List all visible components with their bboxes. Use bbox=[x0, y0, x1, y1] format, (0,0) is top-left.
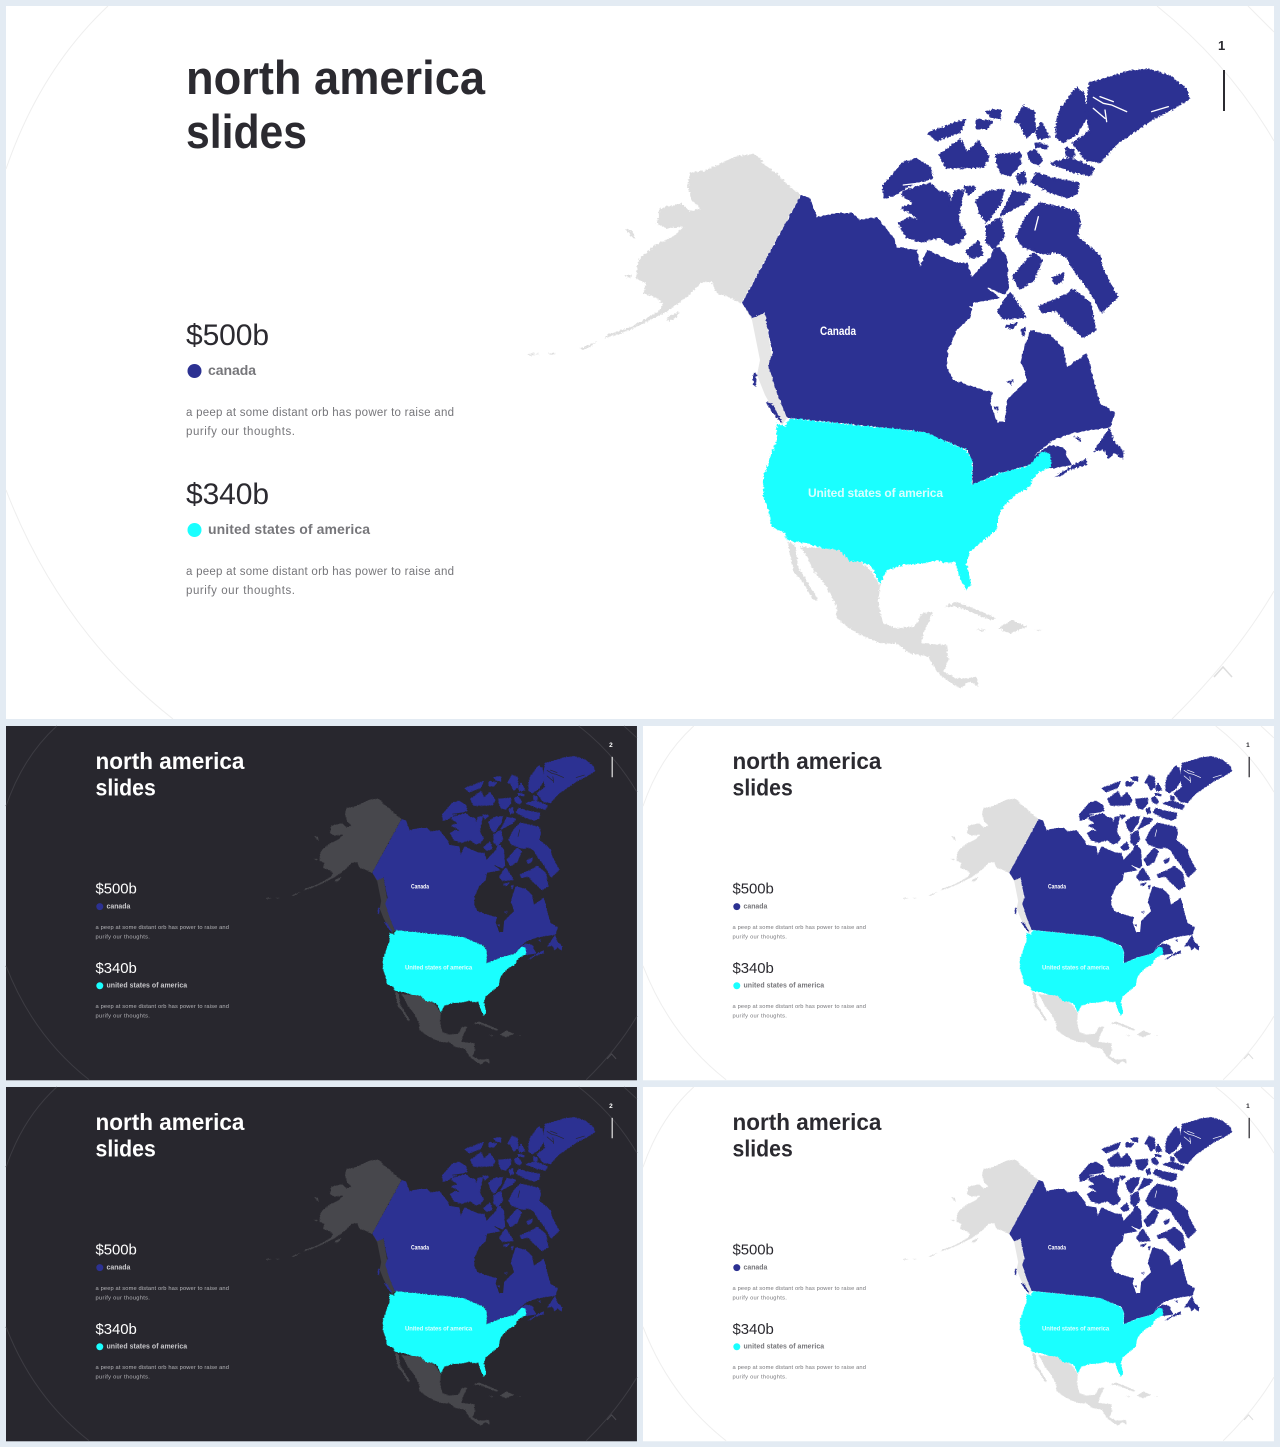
map label: united states: United states of america bbox=[1042, 965, 1110, 971]
page number and marker: 1 bbox=[1246, 742, 1250, 749]
heading bbox=[733, 748, 882, 801]
slide 2: small dark slide bbox=[6, 726, 637, 1080]
heading: slides bbox=[96, 775, 156, 801]
map of north america bbox=[266, 757, 594, 1065]
heading: north america bbox=[96, 748, 245, 774]
stat: canada: canada bbox=[208, 362, 256, 378]
map of north america bbox=[528, 70, 1188, 688]
page number and marker bbox=[609, 1103, 613, 1138]
stat: united states bbox=[733, 960, 866, 1020]
stat: canada: canada bbox=[744, 904, 768, 911]
heading: slides bbox=[186, 105, 307, 158]
stat: canada bbox=[733, 1242, 866, 1301]
heading bbox=[186, 51, 486, 158]
stat: united states bbox=[186, 478, 454, 597]
heading: north america bbox=[96, 1109, 245, 1135]
stat: canada bbox=[186, 319, 454, 438]
stat: canada: a peep at some distant orb has power to raise and bbox=[96, 1286, 229, 1292]
map of north america bbox=[903, 1118, 1231, 1426]
stat: canada bbox=[96, 881, 229, 940]
heading bbox=[96, 1109, 245, 1162]
page number and marker bbox=[609, 742, 613, 777]
slide 4: small dark slide bbox=[6, 1087, 637, 1441]
map label: canada: Canada bbox=[1048, 885, 1067, 891]
stat: united states: purify our thoughts. bbox=[733, 1375, 787, 1381]
map label: united states: United states of america bbox=[1042, 1326, 1110, 1332]
heading bbox=[733, 1109, 882, 1162]
stat: canada: purify our thoughts. bbox=[96, 934, 150, 940]
stat: united states: a peep at some distant orb has power to raise and bbox=[733, 1004, 866, 1010]
page number and marker: 2 bbox=[609, 1103, 613, 1110]
stat: canada: $500b bbox=[733, 881, 774, 898]
stat: united states: purify our thoughts. bbox=[96, 1014, 150, 1020]
stat: canada bbox=[96, 1242, 229, 1301]
stat: united states: purify our thoughts. bbox=[96, 1375, 150, 1381]
stat: canada: canada bbox=[107, 1265, 131, 1272]
heading bbox=[96, 748, 245, 801]
icon: chevron up bbox=[607, 1054, 616, 1059]
map label: united states: United states of america bbox=[405, 1326, 473, 1332]
page number and marker: 1 bbox=[1246, 1103, 1250, 1110]
map of north america bbox=[903, 757, 1231, 1065]
stat: canada: canada bbox=[107, 904, 131, 911]
stat: united states: a peep at some distant orb has power to raise and bbox=[96, 1365, 229, 1371]
page number and marker: 1 bbox=[1218, 38, 1225, 53]
map label: canada: Canada bbox=[1048, 1246, 1067, 1252]
map of north america bbox=[266, 1118, 594, 1426]
icon: chevron up bbox=[1244, 1054, 1253, 1059]
stat: canada: purify our thoughts. bbox=[733, 934, 787, 940]
stat: united states: a peep at some distant orb has power to raise and bbox=[96, 1004, 229, 1010]
stat: united states bbox=[96, 1321, 229, 1381]
heading: north america bbox=[733, 1109, 882, 1135]
slide 3: small light slide bbox=[643, 726, 1274, 1080]
stat: united states: purify our thoughts. bbox=[733, 1014, 787, 1020]
slide 1: large light slide bbox=[6, 6, 1274, 719]
stat: canada: a peep at some distant orb has power to raise and bbox=[733, 925, 866, 931]
stat: united states: $340b bbox=[186, 478, 269, 511]
stat: canada: purify our thoughts. bbox=[96, 1295, 150, 1301]
icon: chevron up bbox=[1244, 1415, 1253, 1420]
map label: canada: Canada bbox=[411, 1246, 430, 1252]
stat: united states: purify our thoughts. bbox=[186, 585, 295, 597]
icon: chevron up bbox=[607, 1415, 616, 1420]
heading: north america bbox=[186, 51, 486, 104]
map label: canada: Canada bbox=[411, 885, 430, 891]
map label: canada: Canada bbox=[820, 324, 856, 338]
stat: canada bbox=[733, 881, 866, 940]
page number and marker bbox=[1218, 38, 1225, 111]
stat: canada: a peep at some distant orb has power to raise and bbox=[96, 925, 229, 931]
stat: united states: united states of america bbox=[107, 1344, 187, 1351]
stat: canada: $500b bbox=[186, 319, 269, 352]
stat: canada: purify our thoughts. bbox=[733, 1295, 787, 1301]
stat: united states: $340b bbox=[733, 1321, 774, 1338]
stat: united states: united states of america bbox=[208, 521, 370, 537]
stat: united states bbox=[733, 1321, 866, 1381]
stat: canada: $500b bbox=[733, 1242, 774, 1259]
stat: canada: purify our thoughts. bbox=[186, 426, 295, 438]
icon: chevron up bbox=[1214, 667, 1232, 677]
stat: canada: a peep at some distant orb has power to raise and bbox=[733, 1286, 866, 1292]
stat: united states: united states of america bbox=[744, 1344, 824, 1351]
stat: united states: united states of america bbox=[744, 983, 824, 990]
stat: united states: $340b bbox=[96, 1321, 137, 1338]
stat: united states: $340b bbox=[96, 960, 137, 977]
stat: united states: a peep at some distant orb has power to raise and bbox=[733, 1365, 866, 1371]
stat: canada: $500b bbox=[96, 881, 137, 898]
stat: canada: canada bbox=[744, 1265, 768, 1272]
stat: united states: united states of america bbox=[107, 983, 187, 990]
slide 5: small light slide bbox=[643, 1087, 1274, 1441]
heading: slides bbox=[733, 1136, 793, 1162]
heading: north america bbox=[733, 748, 882, 774]
page number and marker bbox=[1246, 742, 1250, 777]
stat: canada: a peep at some distant orb has power to raise and bbox=[186, 407, 454, 419]
stat: united states: $340b bbox=[733, 960, 774, 977]
page number and marker: 2 bbox=[609, 742, 613, 749]
heading: slides bbox=[733, 775, 793, 801]
map label: united states: United states of america bbox=[405, 965, 473, 971]
heading: slides bbox=[96, 1136, 156, 1162]
stat: united states: a peep at some distant orb has power to raise and bbox=[186, 566, 454, 578]
map label: united states: United states of america bbox=[808, 486, 943, 500]
page number and marker bbox=[1246, 1103, 1250, 1138]
stat: united states bbox=[96, 960, 229, 1020]
stat: canada: $500b bbox=[96, 1242, 137, 1259]
